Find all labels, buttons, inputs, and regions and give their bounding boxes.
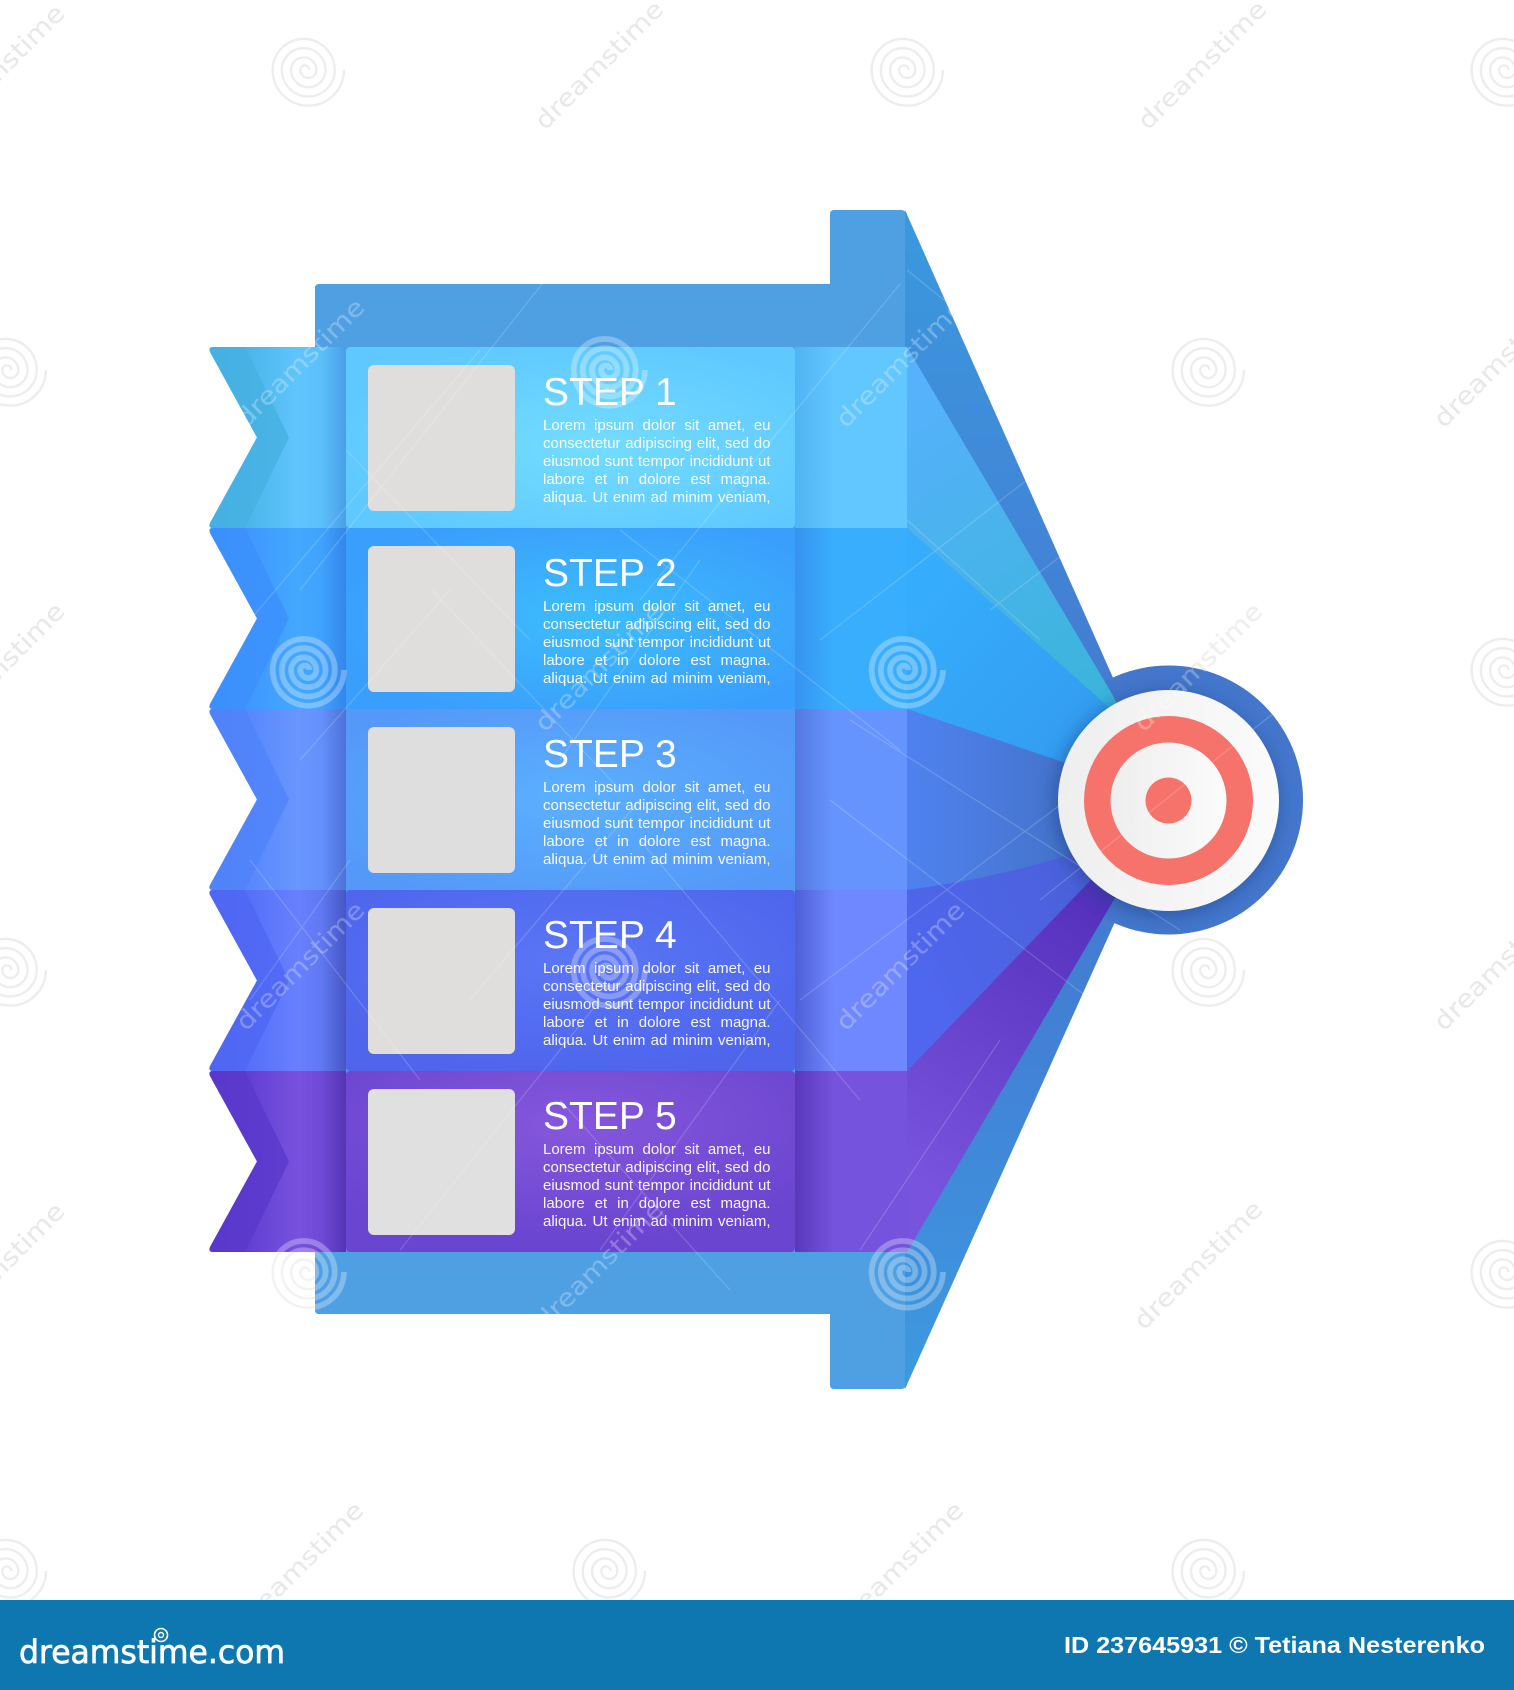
text: step 5 body: eiusmod sunt tempor incididunt ut [543, 1177, 770, 1194]
text: step 1 body: aliqua. Ut enim ad minim veniam, [543, 489, 770, 506]
watermark text over graphic [230, 293, 1268, 1335]
text: step 3 body: Lorem ipsum dolor sit amet, eu [543, 779, 770, 796]
band: step 4: STEP 4 [543, 914, 677, 957]
text: step 3 body [543, 779, 770, 868]
watermark text over graphic: dreamstime [529, 1195, 669, 1335]
watermark lines over graphic [250, 270, 1290, 1290]
faint background watermark text: dreamstime [1128, 597, 1268, 737]
band: step 3 [209, 709, 907, 890]
text: step 4 body: Lorem ipsum dolor sit amet, eu [543, 960, 770, 977]
faint background watermark text: dreamstime [1132, 0, 1272, 135]
text: step 5 body: aliqua. Ut enim ad minim veniam, [543, 1213, 770, 1230]
text: step 2 body: Lorem ipsum dolor sit amet, eu [543, 598, 770, 615]
text: step 4 body: labore et in dolore est magna. [543, 1014, 770, 1031]
fan: step 2 [907, 528, 1168, 800]
text: step 2 body: eiusmod sunt tempor incididunt ut [543, 634, 770, 651]
fan: step 3 [907, 709, 1168, 890]
back frame with top and bottom tabs [315, 210, 907, 1389]
target: outer ring [1034, 666, 1303, 934]
faint background watermark text: dreamstime [829, 1496, 969, 1636]
watermark text over graphic: dreamstime [830, 293, 970, 433]
faint background watermark text: dreamstime [529, 0, 669, 135]
text: step 2 body [543, 598, 770, 687]
fan: step 4 [907, 800, 1168, 1071]
text: step 4 body: eiusmod sunt tempor incididunt ut [543, 996, 770, 1013]
footer logo: dreamstime.com [19, 1633, 285, 1671]
text: step 3 body: consectetur adipiscing elit, sed do [543, 797, 770, 814]
band: step 1: STEP 1 [543, 371, 677, 414]
text: step 3 body: aliqua. Ut enim ad minim veniam, [543, 851, 770, 868]
faint background watermark text: dreamstime [1128, 1195, 1268, 1335]
target: white disc [1058, 690, 1279, 911]
faint background watermark text: dreamstime [229, 1496, 369, 1636]
watermark text over graphic: dreamstime [1128, 597, 1268, 737]
target: inner white ring [1110, 742, 1226, 858]
fan: step 5 [907, 810, 1168, 1252]
target: red ring [1084, 716, 1253, 885]
text: step 2 body: consectetur adipiscing elit, sed do [543, 616, 770, 633]
text: step 3 body: labore et in dolore est magna. [543, 833, 770, 850]
footer credit: ID 237645931 © Tetiana Nesterenko [1064, 1632, 1485, 1658]
text: step 1 body [543, 417, 770, 506]
band: step 4 [209, 890, 907, 1071]
funnel back triangle [905, 210, 1168, 1389]
text: step 1 body: labore et in dolore est magna. [543, 471, 770, 488]
target: shadow [1054, 692, 1278, 916]
text: step 1 body: Lorem ipsum dolor sit amet, eu [543, 417, 770, 434]
text: step 2 body: labore et in dolore est magna. [543, 652, 770, 669]
band: step 1 [209, 347, 907, 528]
watermark text over graphic: dreamstime [529, 597, 669, 737]
watermark text over graphic: dreamstime [230, 896, 370, 1036]
watermark text over graphic: dreamstime [230, 293, 370, 433]
target: centre dot [1146, 778, 1192, 824]
band: step 5: STEP 5 [543, 1095, 677, 1138]
text: step 2 body: aliqua. Ut enim ad minim veniam, [543, 670, 770, 687]
text: step 4 body [543, 960, 770, 1049]
text: step 4 body: aliqua. Ut enim ad minim veniam, [543, 1032, 770, 1049]
text: step 1 body: eiusmod sunt tempor incididunt ut [543, 453, 770, 470]
band: step 2 [209, 528, 907, 709]
text: step 4 body: consectetur adipiscing elit, sed do [543, 978, 770, 995]
fan: step 1 [907, 347, 1168, 800]
footer bar [0, 1600, 1514, 1690]
text: step 5 body [543, 1141, 770, 1230]
text: step 5 body: labore et in dolore est magna. [543, 1195, 770, 1212]
band: step 5 [209, 1071, 907, 1252]
text: step 5 body: consectetur adipiscing elit, sed do [543, 1159, 770, 1176]
band: step 2: STEP 2 [543, 552, 677, 595]
text: step 1 body: consectetur adipiscing elit, sed do [543, 435, 770, 452]
band: step 3: STEP 3 [543, 733, 677, 776]
watermark text over graphic: dreamstime [830, 896, 970, 1036]
text: step 5 body: Lorem ipsum dolor sit amet, eu [543, 1141, 770, 1158]
text: step 3 body: eiusmod sunt tempor incididunt ut [543, 815, 770, 832]
watermark spirals over graphic [273, 339, 943, 1308]
